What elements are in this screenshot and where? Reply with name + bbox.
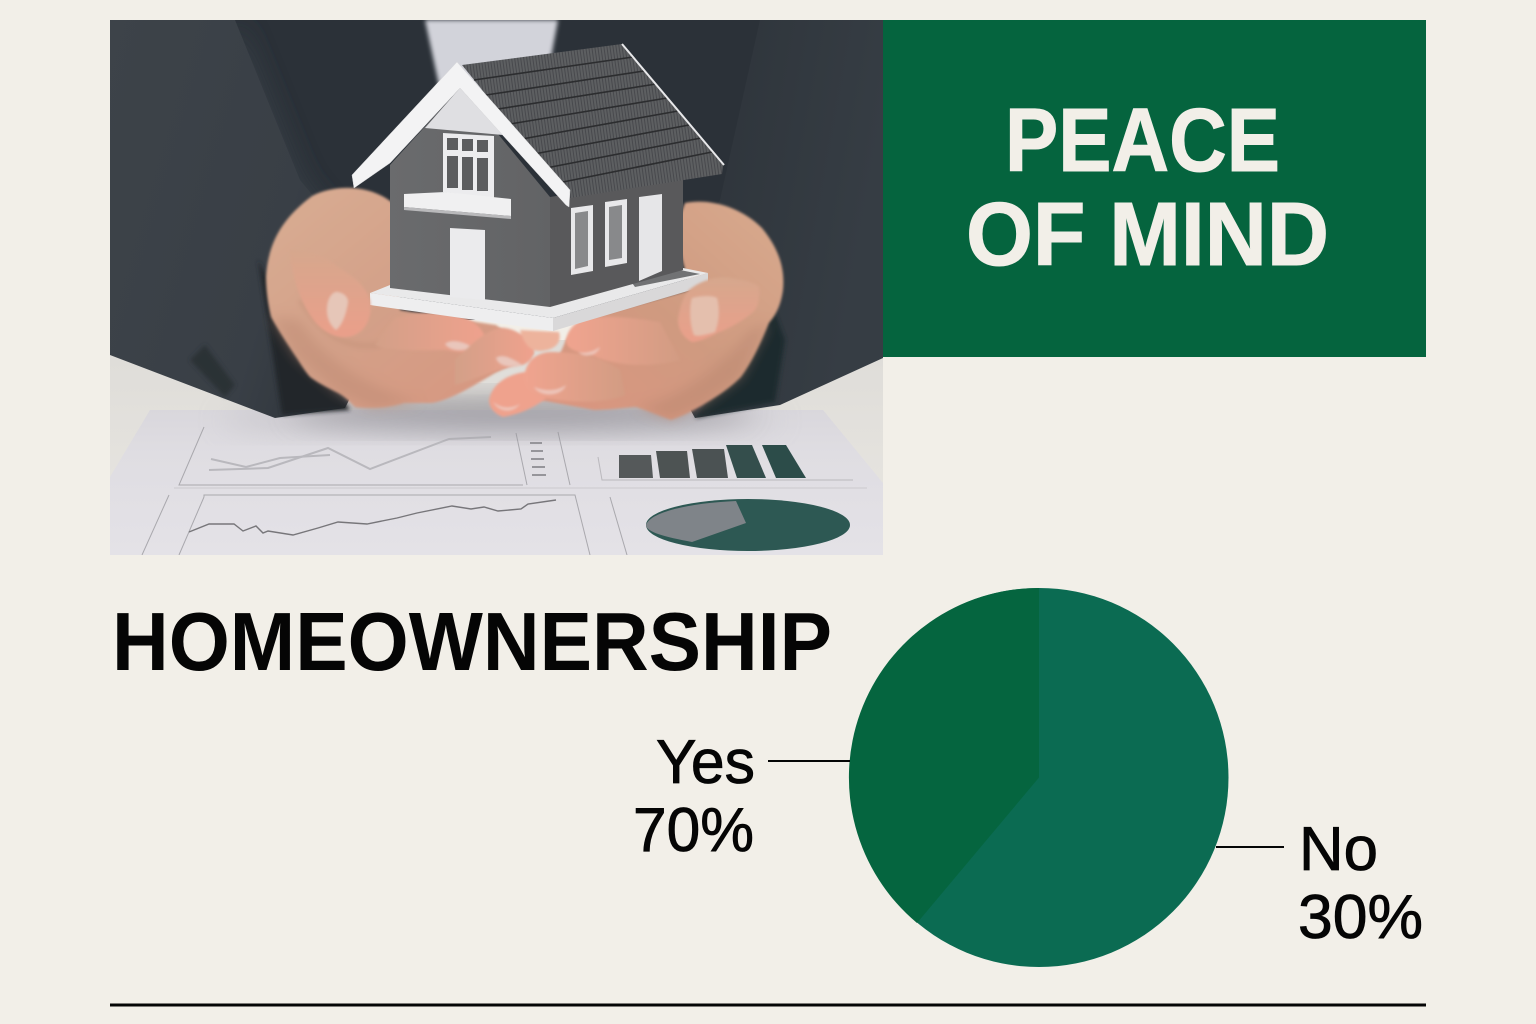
label: yes 70%: 70%	[633, 796, 754, 865]
suit jacket	[110, 20, 883, 428]
leader line: no	[1216, 846, 1284, 848]
pie chart	[849, 588, 1228, 967]
side door	[639, 194, 662, 281]
left thumb	[298, 283, 372, 338]
centre fingertip	[520, 330, 560, 351]
gable panel	[425, 88, 503, 135]
right index finger	[564, 316, 656, 364]
label: no 30%	[1298, 815, 1423, 952]
model house	[352, 44, 724, 331]
side window two	[605, 199, 627, 267]
heading: homeownership: HOMEOWNERSHIP	[112, 595, 832, 688]
house side wall	[550, 175, 683, 307]
pie slice: yes	[849, 588, 1039, 923]
desk surface	[110, 340, 883, 482]
leader line: yes	[768, 760, 850, 762]
pie chart on document	[646, 499, 850, 551]
upper window	[443, 133, 494, 198]
left palm	[266, 188, 534, 408]
left middle finger	[465, 326, 536, 372]
document with charts	[110, 406, 883, 555]
front door	[450, 228, 485, 300]
house front wall	[390, 88, 550, 307]
fingers under the house	[412, 312, 656, 418]
balcony	[404, 192, 511, 219]
faint line chart on document	[209, 437, 491, 470]
photo: hands holding model house over charts	[110, 20, 883, 555]
tiled roof	[462, 44, 724, 198]
label: no 30%: No	[1299, 815, 1378, 884]
label: yes 70%	[633, 728, 755, 865]
house base plate	[370, 268, 708, 331]
white roof trim	[352, 62, 570, 207]
side window one	[571, 205, 593, 275]
right middle finger	[494, 350, 592, 412]
small tick marks on document	[530, 443, 546, 475]
bar chart on document	[619, 445, 806, 478]
trend line on document	[189, 500, 556, 535]
title text: of mind: OF MIND	[966, 185, 1329, 285]
label: yes 70%: Yes	[656, 728, 755, 797]
title text: peace: PEACE	[1005, 91, 1280, 191]
right palm	[540, 202, 783, 420]
left index finger	[412, 312, 484, 352]
right ring finger	[489, 372, 550, 417]
right thumb	[678, 278, 759, 342]
title panel	[883, 20, 1426, 357]
label: no 30%: 30%	[1298, 883, 1423, 952]
